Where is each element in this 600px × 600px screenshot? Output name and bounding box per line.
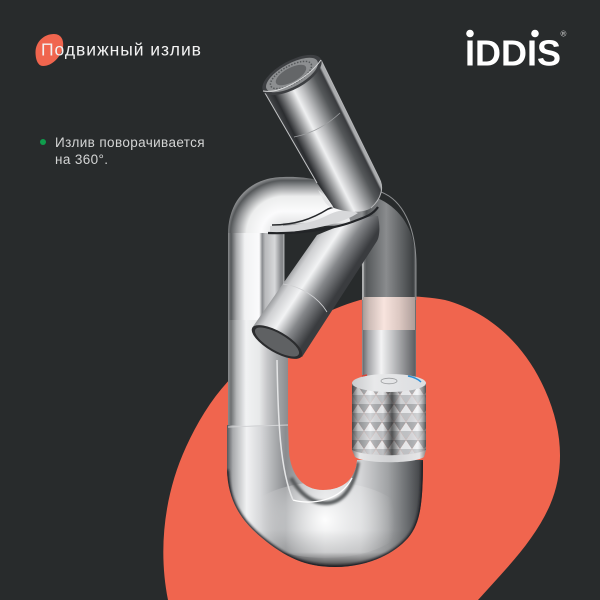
upper aerator head xyxy=(256,47,328,103)
logo i dots xyxy=(466,30,474,37)
faucet upper rotated spout xyxy=(256,47,382,212)
solid tube section above handle xyxy=(363,330,415,385)
faucet joint between spouts xyxy=(268,206,378,233)
logo wordmark: IDDIS xyxy=(465,32,561,74)
translucent tube section over orange xyxy=(363,297,415,331)
handle body xyxy=(352,383,426,456)
faucet diamond-knurled handle xyxy=(352,374,426,462)
handle logo mark xyxy=(381,378,397,384)
faucet lower rotated spout xyxy=(247,216,379,365)
bullet text: Излив поворачивается xyxy=(55,135,205,150)
heading: moving spout with orange accent xyxy=(36,34,202,66)
faucet left tube and top arc xyxy=(228,177,352,428)
hot mark xyxy=(362,375,367,376)
faucet U-shaped bottom xyxy=(220,360,430,570)
faucet back right tube xyxy=(335,190,416,390)
bullet text block xyxy=(40,135,205,167)
heading accent blob xyxy=(36,34,63,66)
cold mark xyxy=(408,376,421,382)
green bullet xyxy=(40,139,46,145)
brand logo xyxy=(465,30,566,74)
handle top cap xyxy=(352,374,426,392)
handle base ring xyxy=(352,450,426,462)
lower aerator disc xyxy=(247,319,307,365)
faucet illustration xyxy=(220,47,430,570)
decorative orange blob xyxy=(163,296,560,600)
logo registered mark: ® xyxy=(560,30,566,38)
bullet text: на 360°. xyxy=(55,152,108,167)
heading text: Подвижный излив xyxy=(41,40,202,60)
